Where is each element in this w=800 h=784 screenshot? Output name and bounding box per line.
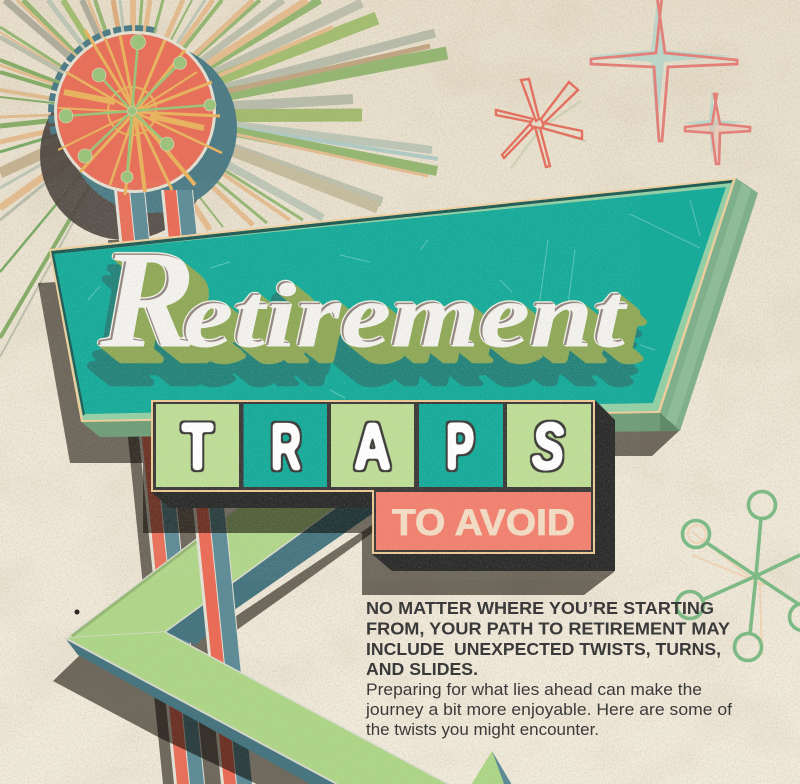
pole shadow column [108,240,252,784]
traps panel [151,400,615,571]
intro body [365,680,732,739]
sign shadow [38,280,680,595]
traps letters: P [446,409,474,483]
traps border [151,400,595,554]
retirement script title: etirement [181,263,626,365]
intro heading: INCLUDE UNEXPECTED TWISTS, TURNS, [366,639,721,659]
sign extrusion [660,178,758,431]
speck [74,610,80,614]
intro heading: NO MATTER WHERE YOU’RE STARTING [366,598,714,618]
burst disc [51,28,222,195]
sunburst rays [0,0,447,357]
letter cells [156,404,239,487]
intro body: Preparing for what lies ahead can make the [366,680,702,699]
rear post [114,190,205,784]
to avoid plate [376,492,591,550]
scratches [88,200,700,398]
intro text [365,598,732,739]
circle drop shadow [40,70,210,240]
big star [587,0,737,141]
traps letters: A [354,409,391,483]
arrow upper arm underside [165,489,392,645]
traps letters: R [271,409,301,483]
disc spokes [66,42,210,177]
ring dashes [51,28,157,134]
disc rays [58,30,222,195]
arrow upper arm [67,489,361,638]
to avoid label: TO AVOID [392,502,575,543]
small star [683,89,750,164]
teal sign [49,178,758,437]
intro heading: FROM, YOUR PATH TO RETIREMENT MAY [366,618,730,638]
sign face [54,187,726,414]
circle extrusion [67,43,237,213]
atom starburst [676,492,800,660]
traps extrusion [372,400,615,571]
arrow shadow [53,655,350,784]
traps letters: T [182,409,213,483]
traps letters [182,409,564,483]
intro body: the twists you might encounter. [366,720,599,739]
intro body: journey a bit more enjoyable. Here are some of [365,700,732,719]
retirement script title [97,221,626,376]
sign border [49,178,736,422]
intro heading [366,598,730,679]
disc nodes [59,34,216,183]
traps letters: S [532,409,564,483]
asterisk star [496,79,586,168]
arrow lower arm [65,632,480,784]
arrow head [468,751,515,784]
front post [161,190,253,784]
retirement script title: R [97,221,194,376]
intro heading: AND SLIDES. [366,659,478,679]
